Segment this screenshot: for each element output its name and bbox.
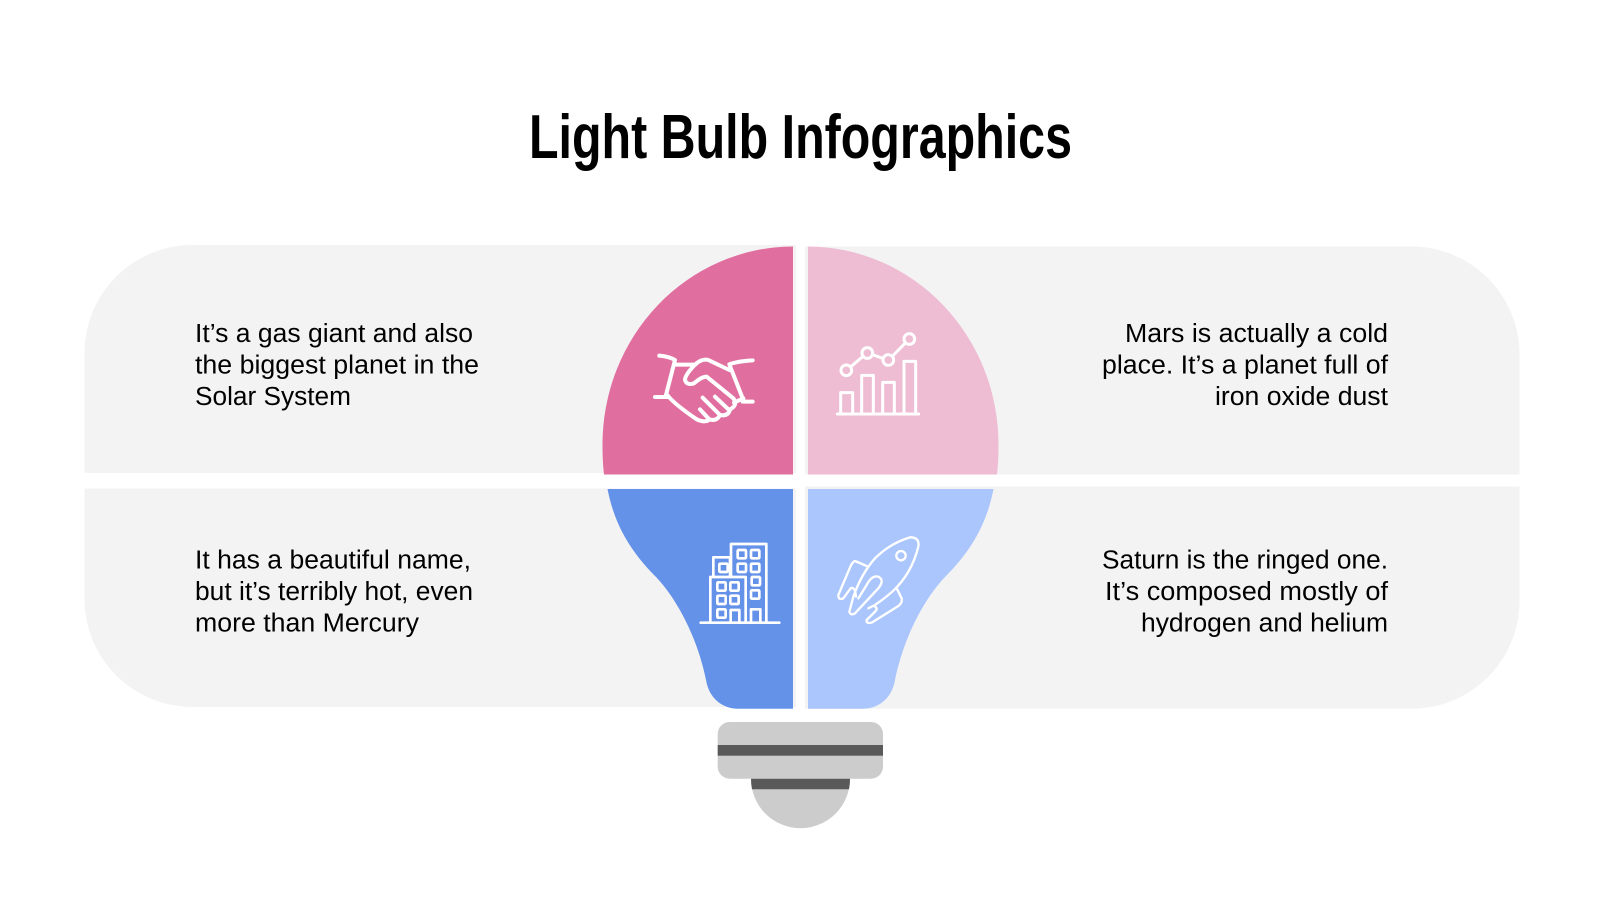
- text: bottom left: It has a beautiful name,: [195, 546, 471, 574]
- bulb base: lower cap: [751, 779, 850, 828]
- text: bottom left: more than Mercury: [195, 610, 419, 638]
- text: bottom right: Saturn is the ringed one.: [1102, 546, 1388, 574]
- text: top right: place. It’s a planet full of: [1102, 352, 1389, 380]
- text: bottom left: but it’s terribly hot, even: [195, 578, 473, 606]
- text: top left: [195, 320, 479, 411]
- text: top right: [1102, 320, 1389, 411]
- bulb base: upper cap: [718, 722, 883, 779]
- text: top left: the biggest planet in the: [195, 352, 479, 380]
- icon: rocket: [838, 537, 919, 623]
- bulb quadrant: light pink: [808, 246, 999, 474]
- panel: bottom right background: [805, 486, 1520, 709]
- text: top left: It’s a gas giant and also: [195, 320, 473, 348]
- panel: top right background: [805, 246, 1520, 474]
- text: top left: Solar System: [195, 383, 351, 411]
- text: bottom right: hydrogen and helium: [1141, 610, 1388, 638]
- icon: buildings: [701, 544, 779, 623]
- icon: bar and line chart: [837, 334, 919, 414]
- panel: top left background: [84, 245, 796, 473]
- text: bottom right: [1102, 546, 1389, 638]
- text: bottom right: It’s composed mostly of: [1105, 578, 1389, 606]
- bulb quadrant: blue: [608, 489, 793, 709]
- text: top right: Mars is actually a cold: [1125, 320, 1388, 348]
- text: top right: iron oxide dust: [1215, 383, 1388, 411]
- title: Light Bulb Infographics: [529, 103, 1072, 172]
- bulb quadrant: pink: [602, 246, 793, 474]
- text: bottom left: [195, 546, 473, 638]
- bulb quadrant: light blue: [808, 489, 994, 709]
- icon: handshake: [655, 356, 753, 421]
- panel: bottom left background: [84, 488, 796, 707]
